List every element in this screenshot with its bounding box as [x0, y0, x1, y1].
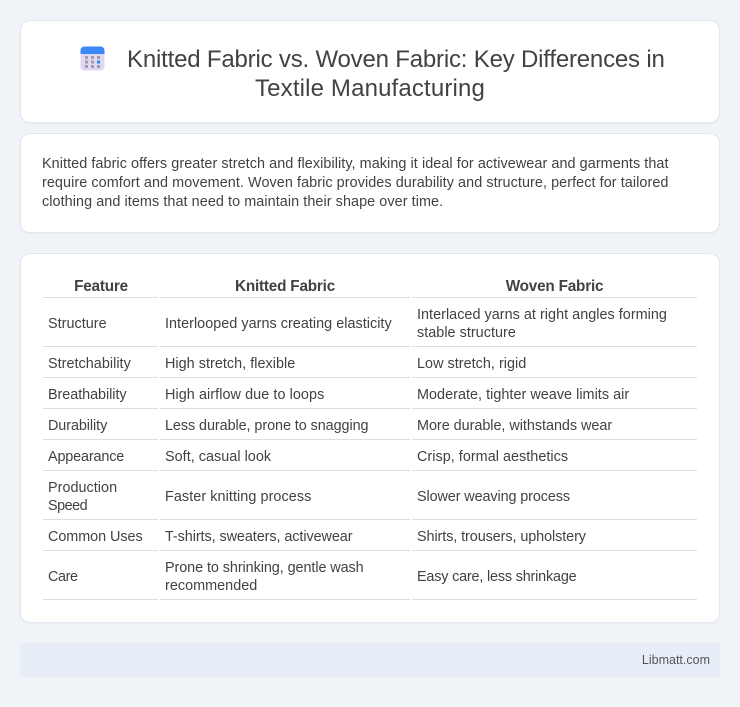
table header: Feature: Feature: [74, 278, 128, 295]
table header: Knitted Fabric: Knitted Fabric: [235, 278, 335, 295]
title: Knitted Fabric vs. Woven Fabric: Key Differences in: [127, 46, 665, 73]
summary text: Knitted fabric offers greater stretch and flexibility, making it ideal for activewear and garments that: [42, 156, 669, 172]
row: Common Uses: [48, 529, 586, 545]
row: Structure: Interlooped yarns creating elasticity: [165, 316, 392, 332]
row: Durability: Less durable, prone to snagging: [165, 418, 368, 434]
row: Production Speed: Faster knitting process: [165, 489, 311, 505]
row: Breathability: Breathability: [48, 387, 127, 403]
row: Structure: [48, 307, 667, 341]
row: Care: [48, 560, 576, 594]
row: Breathability: Moderate, tighter weave limits air: [417, 387, 629, 403]
row: Stretchability: [48, 356, 526, 372]
panel: comparison table: [20, 253, 720, 623]
row: Structure: Interlaced yarns at right angles forming: [417, 307, 667, 323]
row: Care: recommended: [165, 578, 257, 594]
row: Appearance: Appearance: [48, 449, 124, 465]
row: Breathability: [48, 387, 629, 403]
panel: summary: [20, 133, 720, 233]
row: Appearance: Crisp, formal aesthetics: [417, 449, 568, 465]
row: Care: Prone to shrinking, gentle wash: [165, 560, 364, 576]
row: Production Speed: Production: [48, 480, 117, 496]
summary text: [42, 156, 669, 210]
row: Durability: [48, 418, 612, 434]
row: Care: Easy care, less shrinkage: [417, 569, 576, 585]
row: Durability: Durability: [48, 418, 107, 434]
row: Care: Care: [48, 569, 78, 585]
row: Structure: stable structure: [417, 325, 516, 341]
title: Textile Manufacturing: [255, 75, 485, 102]
row: Structure: Structure: [48, 316, 107, 332]
row: Common Uses: Shirts, trousers, upholstery: [417, 529, 586, 545]
row: Stretchability: Low stretch, rigid: [417, 356, 526, 372]
footer credit: Libmatt.com: [642, 653, 710, 667]
icon: calendar: [80, 46, 104, 70]
panel: title card: [20, 20, 720, 123]
summary text: require comfort and movement. Woven fabric provides durability and structure, perfect for tailored: [42, 175, 668, 191]
row: Common Uses: Common Uses: [48, 529, 143, 545]
row: Production Speed: Slower weaving process: [417, 489, 570, 505]
row: Common Uses: T-shirts, sweaters, activewear: [165, 529, 352, 545]
row: Appearance: Soft, casual look: [165, 449, 271, 465]
row: Breathability: High airflow due to loops: [165, 387, 324, 403]
row: Stretchability: High stretch, flexible: [165, 356, 295, 372]
row: Production Speed: [48, 480, 570, 514]
row: Durability: More durable, withstands wear: [417, 418, 612, 434]
footer bar: [20, 643, 720, 677]
title: [127, 46, 665, 102]
table header: Woven Fabric: Woven Fabric: [506, 278, 603, 295]
row: Appearance: [48, 449, 568, 465]
row: Production Speed: Speed: [48, 498, 87, 514]
summary text: clothing and items that need to maintain their shape over time.: [42, 194, 443, 210]
row: Stretchability: Stretchability: [48, 356, 131, 372]
